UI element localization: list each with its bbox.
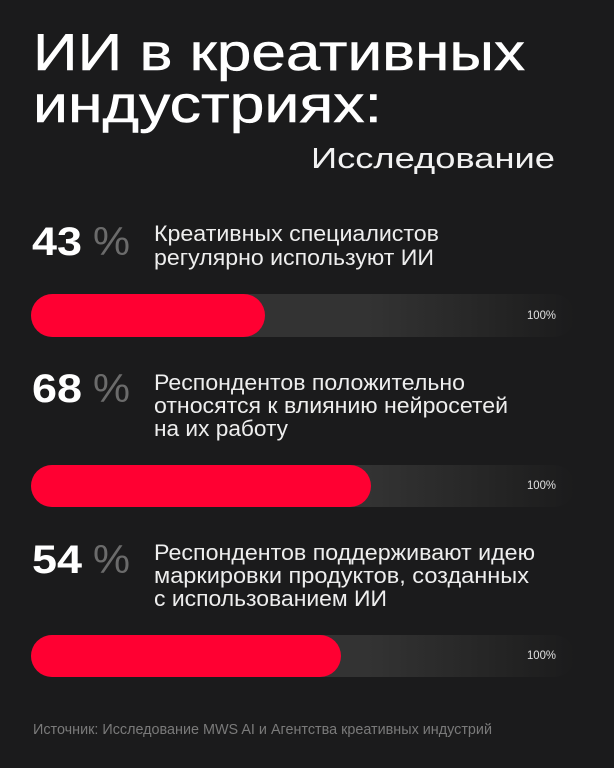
- panel: stat 43%: [31, 220, 575, 337]
- description: [154, 370, 508, 441]
- description: маркировки продуктов, созданных: [154, 563, 530, 588]
- progress bar track: [31, 635, 575, 677]
- description: Респондентов положительно: [154, 370, 465, 395]
- progress bar fill 54%: [31, 635, 341, 677]
- percent sign: %: [93, 220, 130, 264]
- title: индустриях:: [33, 76, 382, 134]
- progress bar fill 68%: [31, 465, 371, 507]
- description: [154, 221, 439, 270]
- description: относятся к влиянию нейросетей: [154, 393, 508, 418]
- title: [33, 24, 525, 134]
- description: Респондентов поддерживают идею: [154, 540, 535, 565]
- description: [154, 540, 535, 611]
- stat number: 54: 54: [32, 538, 83, 582]
- label: 100%: 100%: [527, 308, 556, 322]
- subtitle: Исследование: [311, 143, 555, 175]
- progress bar track: [31, 465, 575, 507]
- description: регулярно используют ИИ: [154, 245, 434, 270]
- stat number: 43: 43: [32, 220, 82, 264]
- progress bar track: [31, 294, 575, 337]
- title: ИИ в креативных: [33, 24, 525, 82]
- percent sign: %: [93, 538, 130, 582]
- label: 100%: 100%: [527, 478, 556, 492]
- stat number: 68: 68: [32, 367, 82, 411]
- description: с использованием ИИ: [154, 586, 387, 611]
- label: 100%: 100%: [527, 648, 556, 662]
- panel: stat 54%: [31, 538, 575, 677]
- description: Креативных специалистов: [154, 221, 439, 246]
- percent sign: %: [93, 367, 130, 411]
- progress bar fill 43%: [31, 294, 265, 337]
- description: на их работу: [154, 416, 289, 441]
- panel: stat 68%: [31, 367, 575, 507]
- source note: Источник: Исследование MWS AI и Агентства креативных индустрий: [33, 722, 492, 738]
